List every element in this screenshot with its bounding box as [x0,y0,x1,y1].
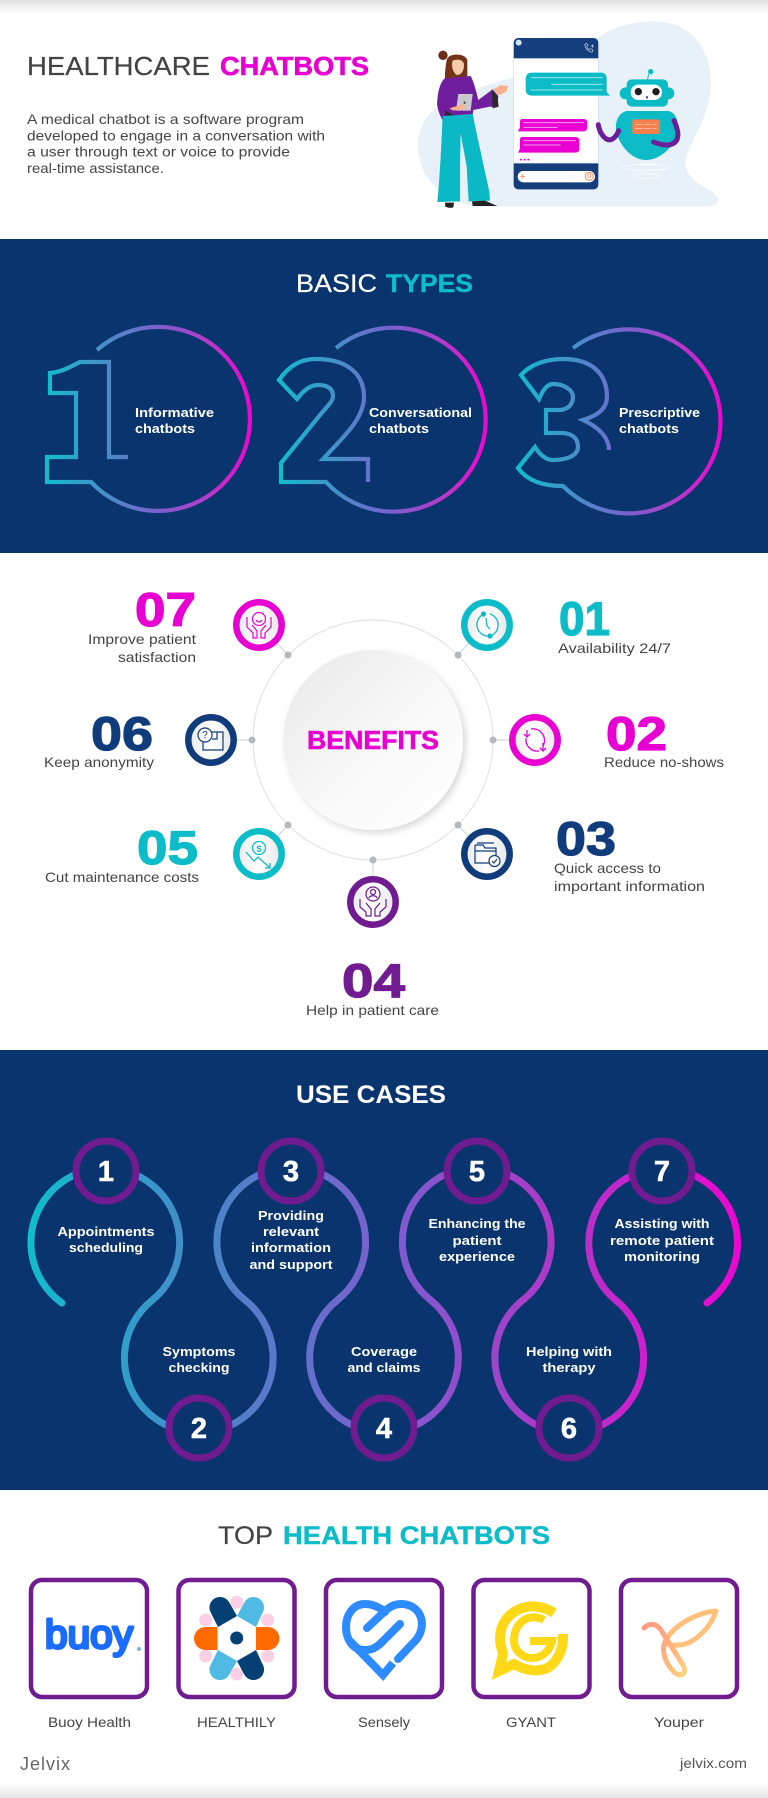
intro paragraph: developed to engage in a conversation with [27,128,325,144]
use case 3: relevant [263,1224,320,1239]
use case 6: Helping with [526,1344,612,1359]
use case 1: scheduling [69,1240,143,1255]
benefit 05: maintenance costs: $ [256,844,262,854]
orbit ring and connectors [237,620,509,876]
benefit 03: quick access: 03 [556,812,616,865]
type 3: prescriptive chatbots: chatbots [619,421,679,436]
heading: use cases: USE CASES [296,1081,446,1109]
central circle with benefits heading [283,650,463,830]
top edge shade [0,0,768,14]
benefit 01: availability [464,592,671,656]
logo card: sensely: Sensely [358,1715,410,1730]
intro paragraph: real-time assistance. [27,160,164,176]
panel background [0,1050,768,1490]
use case 5: experience [439,1249,515,1264]
type 2: conversational chatbots: Conversational [369,405,472,420]
use case 5 [428,1141,526,1264]
use case 2: checking [168,1360,230,1375]
use case 7: monitoring [624,1249,700,1264]
heading: basic types [296,270,473,298]
phone [514,38,598,189]
use case 7 [610,1141,715,1264]
type 2: conversational chatbots: chatbots [369,421,429,436]
type 1: informative chatbots: Informative [135,405,214,420]
benefit 01: availability: Availability 24/7 [558,640,671,656]
use case 3 [250,1141,333,1272]
benefit 07: patient satisfaction: satisfaction [118,649,196,665]
woman [437,51,508,208]
logo card: healthily [178,1580,294,1730]
benefit 07: patient satisfaction: Improve patient [88,631,196,647]
title: healthcare chatbots [27,51,369,81]
use case 1 [58,1141,154,1255]
benefit 02: reduce no-shows [512,707,724,770]
logo card: youper [621,1580,737,1730]
logo card: gyant: GYANT [506,1715,556,1730]
logo card: healthily: HEALTHILY [197,1715,276,1730]
benefit 06: anonymity: 06 [91,707,153,760]
benefit 05: maintenance costs: Cut maintenance costs [45,869,199,885]
heading: top health chatbots: TOP [218,1522,273,1550]
panel: intro header [27,21,718,208]
benefit 07: patient satisfaction: 07 [135,583,196,636]
panel: benefits [44,583,724,1018]
benefit 03: quick access [464,812,705,894]
use case 2: 2 [191,1413,207,1445]
use case 4 [348,1344,420,1458]
use case 2: Symptoms [162,1344,236,1359]
logo card: youper: Youper [654,1715,705,1730]
benefit 06: anonymity [44,707,234,770]
use case 3: Providing [258,1208,324,1223]
logo card: sensely [326,1580,442,1730]
benefit 04: patient care: Help in patient care [306,1002,439,1018]
heading: top health chatbots: HEALTH CHATBOTS [283,1522,550,1550]
panel background [0,239,768,553]
benefit 05: maintenance costs: 05 [137,821,198,874]
title: healthcare chatbots: CHATBOTS [220,51,369,81]
heading: basic types: TYPES [386,270,473,298]
teal chat bubble [526,73,610,96]
intro paragraph: A medical chatbot is a software program [27,111,304,127]
use case 4: and claims [348,1360,420,1375]
use case 2 [162,1344,236,1458]
use case 5: 5 [469,1156,485,1188]
snake path connector [31,1167,738,1433]
use case 3: information [251,1240,331,1255]
use case 6: 6 [561,1413,577,1445]
logo card: gyant [474,1580,590,1730]
footer: brand logo: Jelvix [20,1754,70,1774]
logo card: buoy health [31,1580,147,1730]
benefit 06: anonymity: ? [202,730,208,741]
benefit 05: maintenance costs [45,821,282,885]
use case 7: remote patient [610,1233,715,1248]
benefit 01: availability: 01 [559,592,610,645]
logo card: buoy health: buoy [45,1613,133,1657]
panel: use cases [0,1050,768,1490]
type 2: conversational chatbots [279,328,486,512]
orbit dots [248,652,496,864]
intro paragraph [27,111,325,176]
benefit 02: reduce no-shows: 02 [606,707,667,760]
type 1: informative chatbots: chatbots [135,421,195,436]
use case 4: 4 [376,1413,392,1445]
use case 3: and support [250,1257,333,1272]
benefit 07: patient satisfaction [88,583,282,665]
type 3: prescriptive chatbots [518,329,720,513]
panel: basic types [0,239,768,553]
use case 7: Assisting with [614,1216,710,1231]
intro paragraph: a user through text or voice to provide [27,144,290,160]
title: healthcare chatbots: HEALTHCARE [27,51,210,81]
use case 1: Appointments [58,1224,154,1239]
benefit 04: patient care: 04 [342,954,405,1007]
use case 4: Coverage [351,1344,417,1359]
logo card: buoy health: Buoy Health [48,1715,131,1730]
bottom edge shade [0,1783,768,1798]
type 1: informative chatbots [47,327,250,511]
magenta chat bubbles [518,119,587,161]
benefit 03: quick access: Quick access to [554,860,661,876]
use case 6: therapy [542,1360,596,1375]
central circle with benefits heading: BENEFITS [307,725,439,755]
benefit 02: reduce no-shows: Reduce no-shows [604,754,724,770]
panel: top health chatbots [31,1522,737,1730]
heading: basic types: BASIC [296,270,377,298]
robot [598,69,678,178]
illustration: woman, phone and robot [418,21,718,208]
benefit 03: quick access: important information [554,878,705,894]
benefit 06: anonymity: Keep anonymity [44,754,154,770]
use case 7: 7 [654,1156,670,1188]
use case 5: Enhancing the [428,1216,526,1231]
use case 1: 1 [98,1156,114,1188]
footer: website: jelvix.com [679,1755,747,1771]
benefit 04: patient care [306,879,439,1018]
type 3: prescriptive chatbots: Prescriptive [619,405,700,420]
use case 6 [526,1344,612,1458]
use case 3: 3 [283,1156,299,1188]
use case 5: patient [452,1233,502,1248]
background blob [418,21,718,207]
